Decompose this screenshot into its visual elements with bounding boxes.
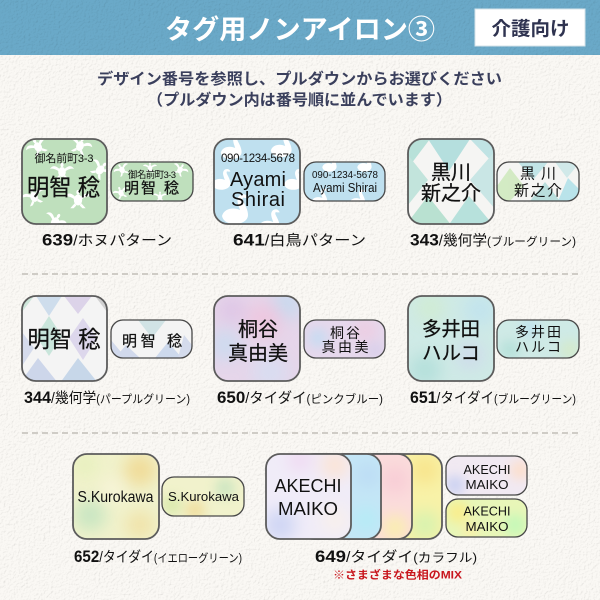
small tag 649 yellow-green xyxy=(446,499,527,538)
large tag 649: MAIKO xyxy=(278,499,338,519)
small tag 641: 090-1234-5678 xyxy=(312,170,379,181)
small tag 343: 黒川 xyxy=(520,166,556,182)
caption 649: 649/タイダイ (カラフル) xyxy=(315,547,477,566)
badge: 介護向け xyxy=(475,9,585,46)
badge: 介護向け: 介護向け xyxy=(492,18,570,40)
product 651 xyxy=(408,293,580,407)
small tag 649 purple xyxy=(445,456,530,495)
small tag 639: 御名前町3-3 xyxy=(128,169,176,181)
large tag 650 xyxy=(213,295,301,382)
caption 650: 650/タイダイ(ピンクブルー) xyxy=(217,388,383,407)
large tag 650: 真由美 xyxy=(228,342,288,365)
caption 651: 651/タイダイ(ブルーグリーン) xyxy=(410,388,576,407)
product 641 xyxy=(212,133,385,250)
large tag 649: AKECHI xyxy=(274,476,342,496)
small tag 649 yellow-green: AKECHI xyxy=(464,504,510,518)
small tag 343 xyxy=(497,162,580,201)
large tag 641: 090-1234-5678 xyxy=(221,153,295,165)
large tag 639: 明智 稔 xyxy=(27,174,100,200)
small tag 344 xyxy=(111,320,192,358)
large tag 641: Shirai xyxy=(231,189,285,211)
large tag 651 xyxy=(408,293,496,386)
large tag 652: S.Kurokawa xyxy=(78,489,154,506)
large tag 343: 黒川 xyxy=(431,162,471,184)
stacked colour samples 649 xyxy=(300,454,442,540)
small tag 641: Ayami Shirai xyxy=(313,181,377,195)
large tag 650: 桐谷 xyxy=(238,318,278,341)
product 639 xyxy=(20,133,193,250)
large tag 652 xyxy=(73,453,159,539)
small tag 650: 桐谷 xyxy=(330,325,360,341)
large tag 343: 新之介 xyxy=(421,182,481,205)
caption 641: 641/白鳥パターン xyxy=(233,230,366,250)
product 652 xyxy=(73,453,244,566)
small tag 344: 明智 稔 xyxy=(122,332,182,350)
product 344 xyxy=(20,296,192,407)
small tag 651: ハルコ xyxy=(515,339,561,355)
large tag 639 xyxy=(21,138,108,225)
caption 652: 652/タイダイ(イエローグリーン) xyxy=(74,547,242,566)
product 650 xyxy=(209,289,385,407)
small tag 343: 新之介 xyxy=(514,182,562,200)
large tag 344: 明智 稔 xyxy=(28,326,100,352)
large tag 651: 多井田 xyxy=(422,318,480,340)
caption 639: 639/ホヌパターン xyxy=(42,230,172,250)
small tag 652: S.Kurokawa xyxy=(168,489,240,504)
caption 343: 343/幾何学(ブルーグリーン) xyxy=(410,230,576,250)
title: タグ用ノンアイロン③ xyxy=(165,14,435,45)
small tag 651: 多井田 xyxy=(515,324,561,340)
instructions text: デザイン番号を参照し、プルダウンからお選びください xyxy=(97,69,502,88)
large tag 344 xyxy=(20,296,107,383)
large tag 649 xyxy=(264,448,351,541)
large tag 651: ハルコ xyxy=(422,342,480,364)
product 649 xyxy=(264,448,530,582)
instructions text: （プルダウン内は番号順に並んでいます） xyxy=(147,90,452,109)
small tag 651 xyxy=(497,318,580,360)
small tag 649 purple: AKECHI xyxy=(464,462,510,477)
small tag 639: 明智 稔 xyxy=(124,179,179,197)
caption 344: 344/幾何学(パープルグリーン) xyxy=(24,388,190,407)
large tag 343 xyxy=(404,139,496,226)
header band xyxy=(0,0,600,55)
small tag 649 yellow-green: MAIKO xyxy=(466,519,508,534)
small tag 649 purple: MAIKO xyxy=(466,477,508,492)
small tag 652 xyxy=(162,477,244,520)
large tag 641 xyxy=(213,138,301,225)
instructions text xyxy=(97,69,502,109)
small tag 641 xyxy=(303,161,386,202)
small tag 650 xyxy=(304,318,385,358)
small tag 639 xyxy=(111,160,193,202)
note: color mix: ※さまざまな色相のMIX xyxy=(333,568,463,582)
product 343 xyxy=(404,139,580,250)
large tag 639: 御名前町3-3 xyxy=(34,151,94,165)
large tag 641: Ayami xyxy=(230,169,286,191)
small tag 650: 真由美 xyxy=(322,339,368,355)
